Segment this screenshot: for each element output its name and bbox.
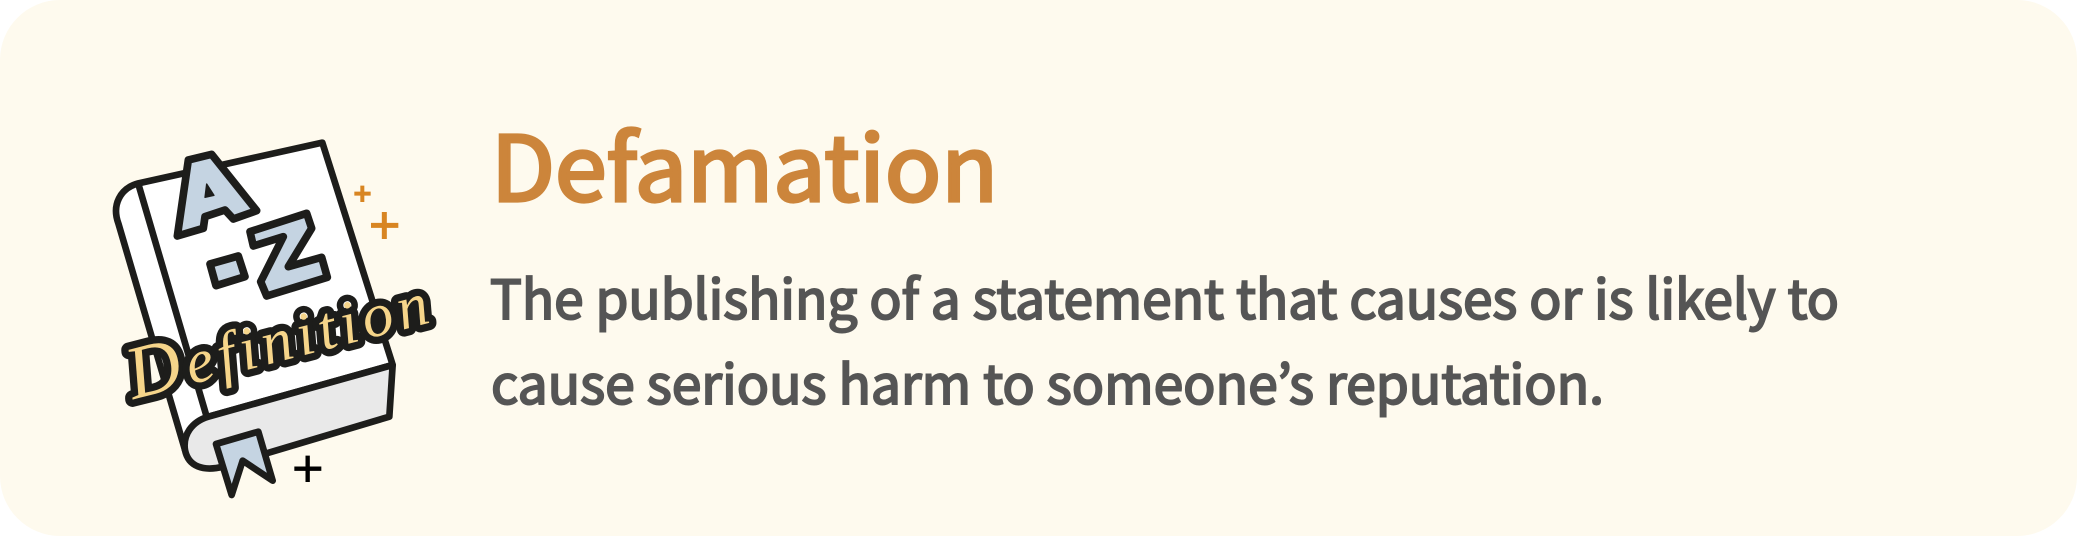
definition text: [490, 256, 1839, 420]
large orange plus: [371, 212, 398, 239]
letter Z: [250, 213, 327, 296]
letter A: [177, 154, 257, 236]
definition line 1: The publishing of a statement that causes or is likely to: [490, 256, 1839, 335]
black plus: [294, 456, 321, 482]
title: Defamation: [491, 97, 998, 227]
small orange plus: [354, 186, 371, 202]
bookmark: [216, 432, 273, 495]
book pages: [185, 365, 393, 469]
icon: definition book: [116, 143, 436, 495]
letter A counter: [205, 184, 214, 197]
book spine line: [138, 184, 207, 417]
definition script label: Definition: [116, 258, 436, 416]
dash: [210, 256, 245, 286]
definition line 2: cause serious harm to someone’s reputation.: [491, 341, 1604, 420]
book cover: [116, 143, 393, 450]
